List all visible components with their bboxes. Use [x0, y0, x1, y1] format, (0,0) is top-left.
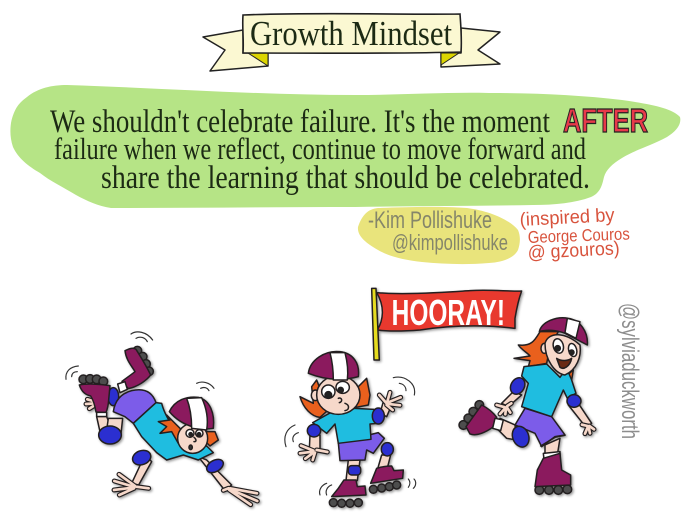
- attribution text: [368, 207, 508, 255]
- skater falling: [66, 332, 257, 505]
- falling skater body: [79, 346, 257, 505]
- banner right tail: [441, 28, 500, 67]
- author handle: @kimpollishuke: [392, 230, 508, 255]
- inspired line 1: (inspired by: [519, 205, 616, 231]
- hooray flag: [372, 288, 522, 360]
- wobbling motion lines: [285, 377, 416, 495]
- inspired line 2: George Couros: [527, 224, 630, 247]
- banner right fold: [441, 53, 459, 65]
- yellow attribution blob: [358, 207, 520, 264]
- skater rolling happily: [459, 318, 594, 494]
- vertical artist credit: @sylviaduckworth: [616, 303, 643, 439]
- quote line 1: We shouldn't celebrate failure. It's the moment: [50, 104, 550, 140]
- flag group: [372, 288, 522, 360]
- green quote blob: [10, 85, 680, 208]
- banner left fold: [248, 53, 268, 66]
- banner main panel: [243, 14, 461, 53]
- falling motion lines: [66, 332, 214, 391]
- skater wobbling: [285, 351, 416, 507]
- quote text: [50, 102, 648, 196]
- title banner: [203, 14, 500, 71]
- quote line 3: share the learning that should be celebrated.: [101, 160, 590, 196]
- title text: Growth Mindset: [250, 14, 452, 53]
- flag text: HOORAY!: [392, 292, 505, 333]
- inspired by note: [519, 205, 630, 264]
- inspired line 3: @ gzouros): [527, 238, 620, 264]
- emphasized word AFTER: AFTER: [563, 102, 648, 139]
- author name: -Kim Pollishuke: [368, 207, 492, 234]
- happy skater body: [459, 318, 594, 494]
- wobbling skater body: [300, 351, 403, 507]
- banner left tail: [203, 30, 268, 71]
